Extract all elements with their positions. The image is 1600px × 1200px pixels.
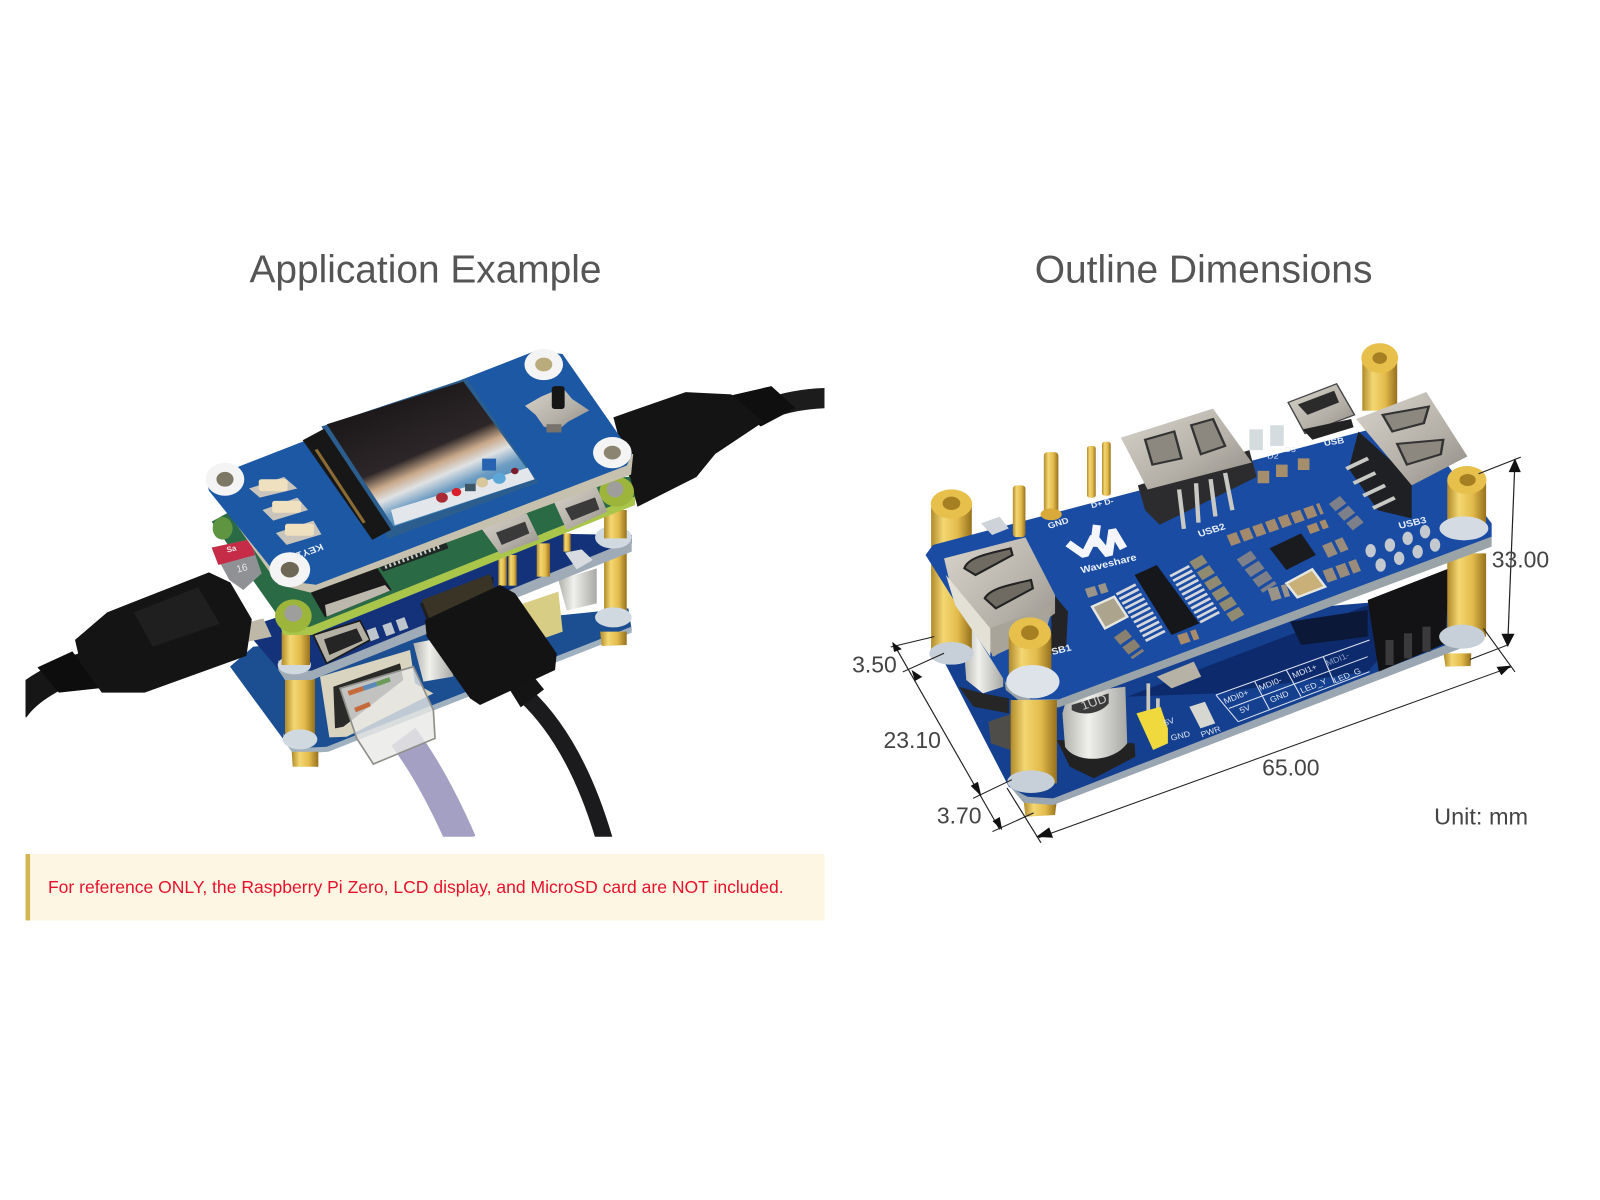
heading: Application Example: Application Example <box>249 249 602 292</box>
spacer: upper left pillar <box>282 632 310 665</box>
ribbon connector teeth <box>385 547 440 567</box>
banner accent bar <box>26 854 30 920</box>
capacitor: rear <box>558 568 597 611</box>
plug: RJ45 clear housing <box>340 667 435 764</box>
plug: right USB <box>613 392 763 507</box>
crystal: right <box>1286 569 1325 597</box>
lower stack of boards and connectors <box>212 477 635 767</box>
LCD HAT top board <box>206 349 633 593</box>
pogo pins: gold <box>498 533 571 586</box>
dimension: 65.00: 65.00 <box>1262 755 1320 781</box>
connector block: black <box>1368 568 1449 672</box>
cable: left USB <box>13 663 91 711</box>
block: yellow component <box>522 592 563 639</box>
front cables and plugs <box>340 585 605 842</box>
PWR LED: PWR <box>1199 724 1222 739</box>
ring: mid left <box>278 658 311 674</box>
unit note: Unit: mm <box>1434 803 1528 829</box>
board: lower PCB rim <box>1009 630 1484 805</box>
SMD component rows <box>1086 500 1358 655</box>
card: MicroSD: 16 <box>235 562 249 576</box>
logo: Waveshare: Waveshare <box>1080 553 1138 576</box>
strain relief: left USB <box>38 651 102 693</box>
capacitor: front aluminium: 1UD <box>1079 692 1109 713</box>
jumper: yellow header <box>1136 683 1191 750</box>
mounting hole: bottom <box>269 552 310 587</box>
capacitor: rear <box>963 627 1003 693</box>
photo: application example stacked boards <box>13 349 836 842</box>
crystal: left <box>1092 597 1127 628</box>
pillar: front left <box>1006 617 1059 793</box>
strain relief: micro USB <box>502 666 544 707</box>
connector: mini HDMI <box>313 621 370 663</box>
mounting hole: right <box>593 437 632 468</box>
plug: micro USB overmold <box>425 585 557 705</box>
PWR LED pad <box>565 549 593 569</box>
upper PCB face <box>926 418 1492 707</box>
components upper half <box>1013 384 1467 540</box>
LCD flex connector <box>303 429 391 540</box>
buttons: KEY1 KEY2 KEY3 <box>249 477 325 560</box>
connector: HDMI <box>308 567 392 617</box>
LEDs: D1 D2 D3 <box>1249 425 1296 460</box>
connector: micro USB <box>1288 384 1355 448</box>
PWR LED <box>1189 702 1222 739</box>
connector: USB1 <box>944 537 1073 658</box>
pad: Pi Zero back corner <box>213 517 233 540</box>
dimension arrowheads <box>892 458 1521 838</box>
inductor: rear black <box>959 687 1009 713</box>
connector: USB3: USB3 <box>1397 515 1428 532</box>
components on upper PCB front <box>944 466 1488 793</box>
spacer: lower right pillar <box>604 554 627 610</box>
buttons: KEY1 KEY2 KEY3: KEY1 <box>294 541 325 560</box>
silkscreen table: MDI1+ <box>1290 662 1319 680</box>
ring: back left lower <box>929 642 974 665</box>
infographic canvas <box>26 254 1548 920</box>
connector: micro USB: USB <box>1323 436 1346 448</box>
jack: Ethernet interior <box>333 663 403 728</box>
silkscreen table: LED_Y <box>1298 676 1329 695</box>
plug: left USB recess <box>134 587 220 647</box>
ring: lower left <box>283 729 317 749</box>
LED pad: top left <box>981 517 1009 535</box>
foot: right spacer <box>600 632 627 646</box>
jack: Ethernet body <box>320 650 433 737</box>
board: middle PCB <box>243 533 632 675</box>
LEDs: D1 D2 D3: D3 <box>1285 446 1296 454</box>
IC: QFN chip <box>1270 533 1316 570</box>
mounting hole: left <box>206 463 244 496</box>
jumper: yellow header: 5V <box>1162 715 1176 728</box>
pogo pins <box>1013 442 1115 537</box>
connector block: rear <box>1290 610 1368 645</box>
foot: front spacer <box>1024 800 1057 817</box>
inductor: grey <box>988 713 1012 751</box>
strain relief: right USB <box>726 386 796 426</box>
card red band <box>212 539 255 565</box>
connector: power base plate <box>420 577 493 620</box>
pogo pins: GND <box>1046 516 1071 531</box>
spacer: lower left pillar <box>285 678 315 734</box>
card: MicroSD <box>212 539 262 590</box>
silkscreen table <box>1216 640 1370 722</box>
dimension strokes <box>891 457 1521 843</box>
connector: USB3 <box>1346 392 1467 532</box>
cable: Ethernet <box>403 737 462 842</box>
LCD taskbar strip <box>391 468 535 525</box>
board: upper PCB rim <box>1004 535 1492 707</box>
silkscreen table: MDI0+ <box>1222 687 1250 706</box>
dimension lines <box>891 457 1521 843</box>
LCD screen image <box>327 382 535 527</box>
board rim: Pi Zero <box>275 497 635 635</box>
board: upper PCB <box>926 418 1492 699</box>
photo: outline dimensions board <box>891 343 1521 843</box>
solder joints <box>1365 525 1440 572</box>
pad: Pi Zero right screw <box>599 477 634 507</box>
board rim: bottom PCB <box>283 627 632 754</box>
silkscreen table: MDI0- <box>1257 675 1283 692</box>
mounting hole: top <box>524 349 563 380</box>
right USB cable and plug <box>613 386 836 507</box>
pad: Pi Zero left screw <box>275 599 312 633</box>
IC: TSSOP pins <box>1125 570 1210 638</box>
logo: Waveshare <box>1068 525 1138 576</box>
dimension: 3.70: 3.70 <box>937 802 982 828</box>
jumper: yellow header: GND <box>1169 729 1191 743</box>
dimension: 23.10: 23.10 <box>884 727 941 753</box>
dimension: 33.00: 33.00 <box>1492 546 1549 572</box>
spacer: upper right pillar <box>604 510 627 538</box>
lower layer of the board <box>929 489 1486 817</box>
pillar: back right <box>1361 343 1398 411</box>
connector: micro USB right <box>553 487 607 530</box>
ribbon connector <box>380 542 448 572</box>
RJ45 coloured wires <box>348 679 390 710</box>
small capacitors near LEDs <box>1258 458 1309 483</box>
pillar: back left <box>931 489 972 657</box>
banner text: For reference ONLY, the Raspberry Pi Zero, LCD display, and MicroSD card are NOT included. <box>48 877 784 897</box>
LCD module base <box>321 378 538 539</box>
ring: lower right <box>595 607 632 627</box>
board: bottom PCB <box>230 608 632 752</box>
foot: left spacer <box>292 752 318 767</box>
connector block slots <box>1385 627 1431 665</box>
silkscreen table: GND <box>1268 689 1290 704</box>
pillar: right upper <box>1439 466 1488 540</box>
shadow under upper PCB <box>1127 580 1449 697</box>
cable: right USB <box>780 388 824 415</box>
connector: USB2: USB2 <box>1196 522 1228 540</box>
IC: TSSOP chip <box>1135 565 1199 635</box>
heading: Outline Dimensions: Outline Dimensions <box>1035 249 1372 292</box>
LCD icons <box>436 459 519 503</box>
board: green Raspberry Pi Zero <box>212 477 635 628</box>
connector: USB1: SB1 <box>1050 643 1073 658</box>
joystick <box>525 386 589 432</box>
silkscreen table: LED_G <box>1332 666 1363 685</box>
capacitor: lower <box>413 637 453 682</box>
pillar: right lower <box>1447 553 1486 637</box>
banner background <box>26 854 824 920</box>
component under board <box>1157 662 1201 688</box>
foot: right spacer <box>1444 653 1471 667</box>
capacitor: front aluminium <box>1062 687 1127 759</box>
dimension: 3.50: 3.50 <box>852 651 897 677</box>
LEDs: D1 D2 D3 <box>367 617 408 641</box>
connector: large port under plug <box>422 574 495 620</box>
left USB cable and plug <box>13 572 252 711</box>
ring: right lower <box>1439 625 1485 649</box>
silkscreen table: MDI1- <box>1324 650 1351 668</box>
board: lower PCB <box>933 597 1484 798</box>
capacitor base <box>1057 740 1135 778</box>
silver jack behind left plug <box>245 618 272 642</box>
silkscreen table: 5V <box>1238 702 1252 715</box>
pogo pins: D+ D- <box>1090 497 1115 510</box>
connector: USB2 <box>1121 409 1257 540</box>
board: LCD HAT <box>206 351 632 585</box>
plug: left USB <box>75 572 252 693</box>
LCD flex gold traces <box>316 449 364 523</box>
connector: micro USB centre <box>480 513 539 554</box>
board rim: middle PCB <box>278 540 632 680</box>
ring: mid right <box>595 526 632 549</box>
LEDs: D1 D2 D3: D2 <box>1267 452 1279 460</box>
card: MicroSD: Sa <box>226 543 238 555</box>
cable: micro USB <box>525 695 605 842</box>
board: LCD HAT rim <box>206 449 633 593</box>
notice banner <box>26 854 824 920</box>
